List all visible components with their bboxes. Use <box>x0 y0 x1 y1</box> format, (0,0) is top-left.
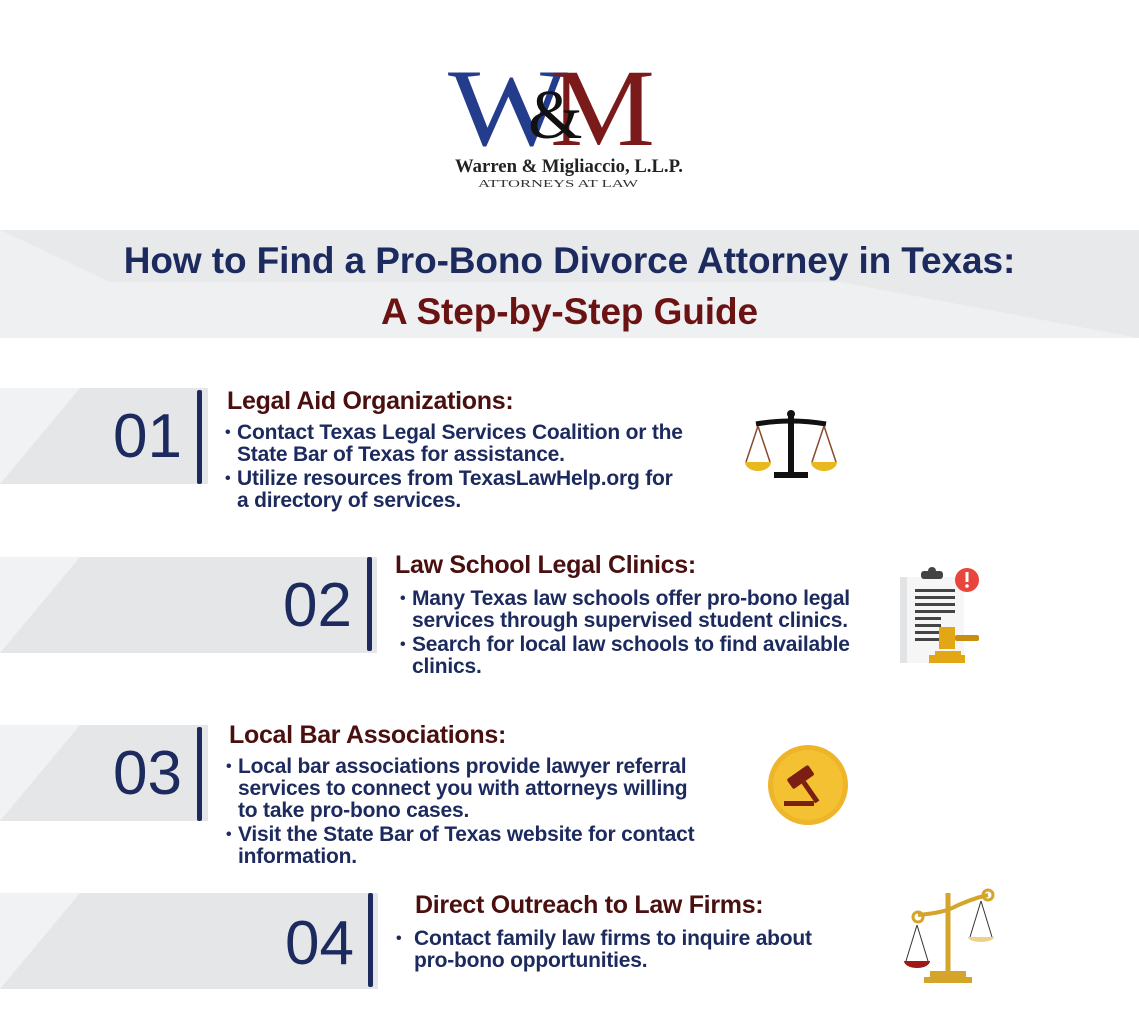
icon: golden scales <box>904 888 994 983</box>
bullets 03: to take pro-bono cases. <box>238 799 469 822</box>
step 03 <box>0 721 848 868</box>
logo: ATTORNEYS AT LAW <box>478 179 639 190</box>
logo: W <box>448 50 568 169</box>
step 04 <box>0 888 994 989</box>
bullets 01: State Bar of Texas for assistance. <box>237 443 565 466</box>
icon: scales <box>745 410 837 478</box>
bullets 04 <box>396 927 812 972</box>
title band <box>0 230 1139 338</box>
number 02: 02 <box>283 571 352 640</box>
bullets 03: services to connect you with attorneys willing <box>238 777 687 800</box>
bullets 03 <box>226 755 694 868</box>
heading 04: Direct Outreach to Law Firms: <box>415 891 763 919</box>
title line 2: A Step-by-Step Guide <box>381 291 758 332</box>
number 04: 04 <box>285 909 354 978</box>
bullets 01: Utilize resources from TexasLawHelp.org for <box>237 467 673 490</box>
bullets 02: Many Texas law schools offer pro-bono legal <box>412 587 850 610</box>
bullets 02: clinics. <box>412 655 482 678</box>
bullets 03: information. <box>238 845 357 868</box>
heading 01: Legal Aid Organizations: <box>227 387 513 415</box>
icon: gavel coin <box>768 745 848 825</box>
bullets 02: Search for local law schools to find available <box>412 633 850 656</box>
bullets 01: Contact Texas Legal Services Coalition or the <box>237 421 683 444</box>
title line 1: How to Find a Pro-Bono Divorce Attorney in Texas: <box>124 240 1015 281</box>
bullets 01 <box>226 421 683 512</box>
bullets 03: Local bar associations provide lawyer referral <box>238 755 686 778</box>
logo <box>448 50 683 190</box>
step 01 <box>0 387 837 512</box>
bullets 03: Visit the State Bar of Texas website for contact <box>238 823 694 846</box>
step 02 <box>0 551 979 678</box>
number 03: 03 <box>113 739 182 808</box>
bullets 04: Contact family law firms to inquire about <box>414 927 812 950</box>
icon: clipboard with gavel <box>900 567 979 663</box>
heading 03: Local Bar Associations: <box>229 721 506 749</box>
logo: M <box>550 50 655 169</box>
bullets 02: services through supervised student clinics. <box>412 609 848 632</box>
logo: Warren & Migliaccio, L.L.P. <box>455 156 683 177</box>
bullets 01: a directory of services. <box>237 489 461 512</box>
bullets 02 <box>400 587 850 678</box>
bullets 04: pro-bono opportunities. <box>414 949 647 972</box>
logo: & <box>528 77 582 154</box>
heading 02: Law School Legal Clinics: <box>395 551 696 579</box>
number 01: 01 <box>113 402 182 471</box>
